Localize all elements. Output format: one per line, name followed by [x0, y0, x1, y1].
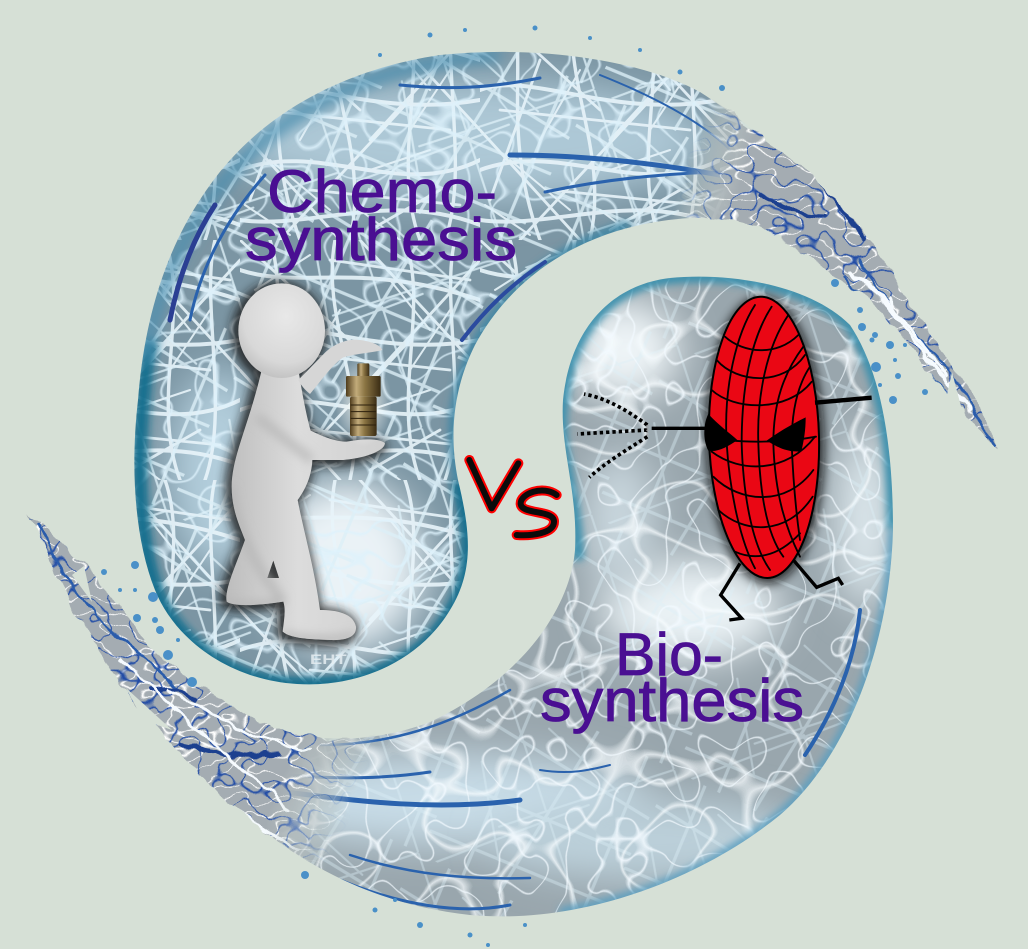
splash droplets: bottom swirl: [101, 561, 527, 947]
person head: [238, 283, 325, 378]
character: red cell with spray: [577, 294, 872, 620]
water tail: bottom left: [26, 514, 374, 862]
title: Chemo-synthesis: [245, 158, 517, 273]
title: Chemo-synthesis: synthesis: [245, 206, 517, 273]
person shadow: [224, 285, 382, 642]
left arm nozzle: [652, 423, 707, 433]
title: Bio-synthesis: Bio-: [615, 621, 723, 688]
autoclave glow: [335, 357, 392, 447]
cell eyes: [704, 414, 737, 451]
tail split: bottom left: [72, 566, 172, 730]
cell body: [705, 295, 823, 579]
right arm: [815, 398, 872, 403]
label: VS: [469, 460, 557, 535]
water tail: top right: [680, 104, 998, 450]
person body shading: [227, 417, 355, 640]
spray dots: [577, 394, 647, 477]
cell shadow: [702, 294, 828, 586]
title: Chemo-synthesis: Chemo-: [267, 158, 497, 225]
legs: [721, 560, 843, 620]
autoclave vessel: [346, 363, 381, 436]
panel: chemosynthesis swirl: [134, 26, 998, 684]
title: Bio-synthesis: synthesis: [540, 667, 804, 734]
person body: [226, 369, 385, 640]
watermark: EHT: [310, 651, 347, 667]
title: Bio-synthesis: [540, 621, 804, 734]
panel: biosynthesis swirl: [26, 276, 893, 947]
splash droplets: top swirl: [378, 26, 928, 404]
cell grid lines: [708, 305, 816, 570]
figure: 3D person holding autoclave: [224, 283, 392, 667]
person upper arm: [298, 340, 382, 394]
tail split: top right: [944, 372, 964, 418]
